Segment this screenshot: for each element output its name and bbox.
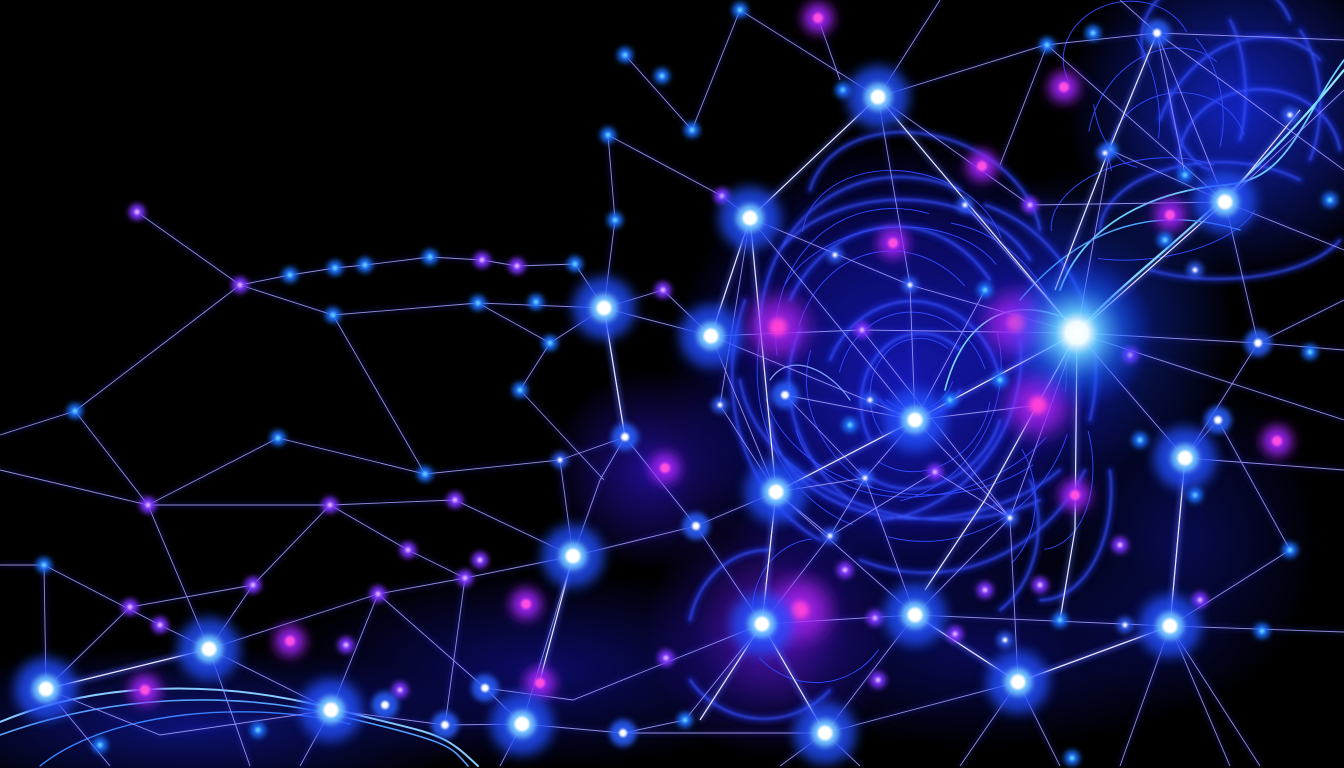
magenta and purple glow spots: [145, 18, 1277, 690]
swirl of blue filaments: [676, 0, 1340, 719]
central hub node: [999, 255, 1155, 411]
